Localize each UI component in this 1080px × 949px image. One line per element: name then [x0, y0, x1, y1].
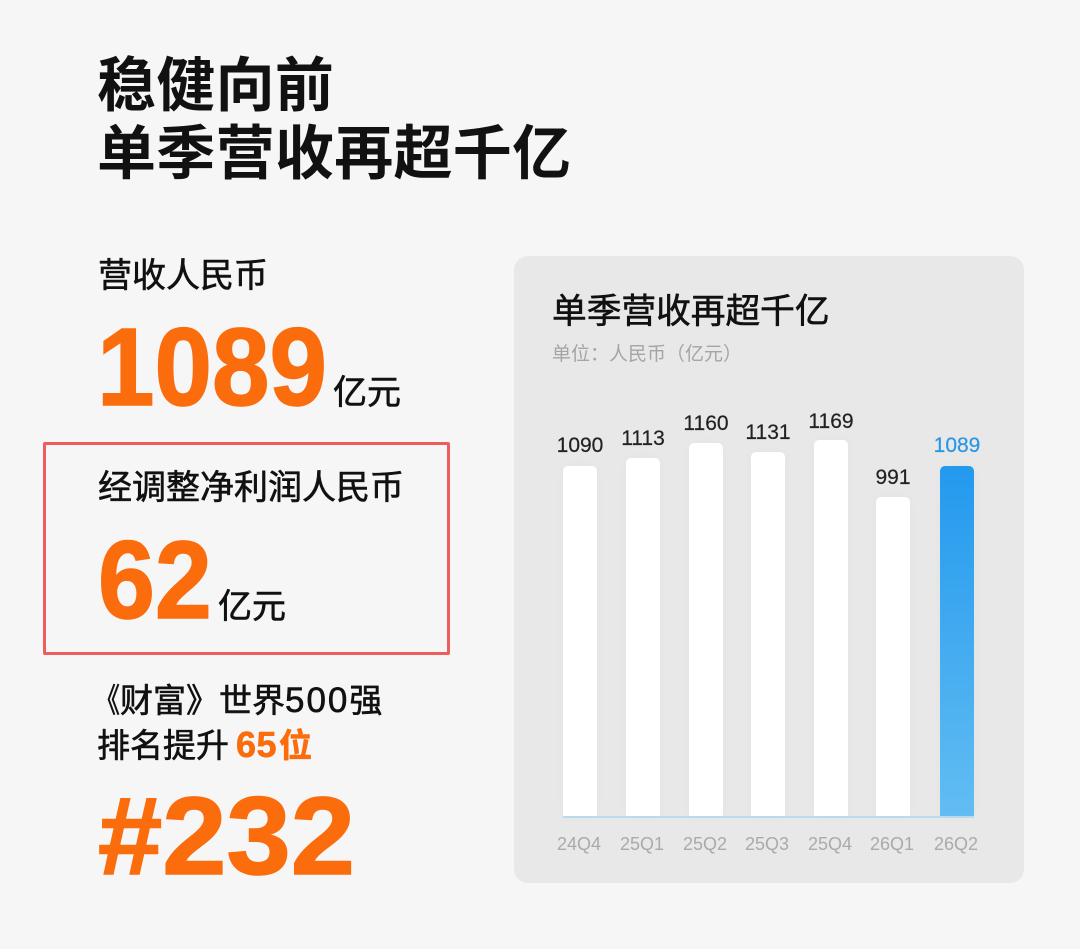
title: 单季营收再超千亿	[97, 121, 571, 187]
column 25Q1	[620, 427, 665, 854]
title	[97, 53, 571, 187]
adjusted net profit figure: 62	[98, 519, 212, 642]
column 25Q3	[745, 421, 791, 854]
Fortune 500 text: 排名提升65位	[97, 724, 312, 765]
Fortune 500 text: 财富》世界500强	[120, 681, 382, 720]
column 25Q2: 25Q2	[683, 834, 727, 854]
column 25Q3: 1131	[745, 421, 791, 444]
axis line	[563, 816, 974, 818]
panel: quarterly revenue chart	[514, 256, 1024, 883]
adjusted net profit figure	[98, 519, 286, 642]
chart title: 单季营收再超千亿	[552, 293, 830, 331]
column 25Q4: 25Q4	[808, 834, 852, 854]
column 24Q4: 24Q4	[557, 834, 601, 854]
Fortune 500 text	[94, 681, 382, 765]
column 25Q1: 1113	[621, 427, 665, 450]
column 26Q1: 26Q1	[870, 834, 914, 854]
revenue figure: 亿元	[333, 374, 401, 412]
column 25Q3: 25Q3	[745, 834, 789, 854]
rank figure: #232	[98, 775, 355, 898]
highlight box: adjusted net profit	[43, 442, 450, 655]
Fortune 500 text: 《	[94, 682, 120, 719]
label: revenue: 营收人民币	[98, 257, 268, 295]
column 26Q1	[870, 466, 914, 854]
column 25Q1: 25Q1	[620, 834, 664, 854]
column 26Q2 highlighted: 26Q2	[934, 834, 978, 854]
title: 稳健向前	[97, 53, 334, 119]
column 25Q4: 1169	[808, 410, 854, 433]
adjusted net profit figure: 亿元	[218, 588, 286, 626]
label: adjusted net profit: 经调整净利润人民币	[98, 469, 404, 507]
column 24Q4: 1090	[557, 434, 603, 457]
column 26Q2 highlighted	[934, 434, 980, 854]
chart unit: 单位：人民币（亿元）	[552, 344, 742, 365]
column 26Q1: 991	[875, 466, 911, 489]
column 25Q4	[808, 410, 854, 854]
column 25Q2	[683, 412, 729, 854]
column 24Q4	[557, 434, 603, 854]
column 26Q2 highlighted: 1089	[934, 434, 980, 457]
revenue figure: 1089	[97, 306, 327, 429]
column 25Q2: 1160	[683, 412, 729, 435]
